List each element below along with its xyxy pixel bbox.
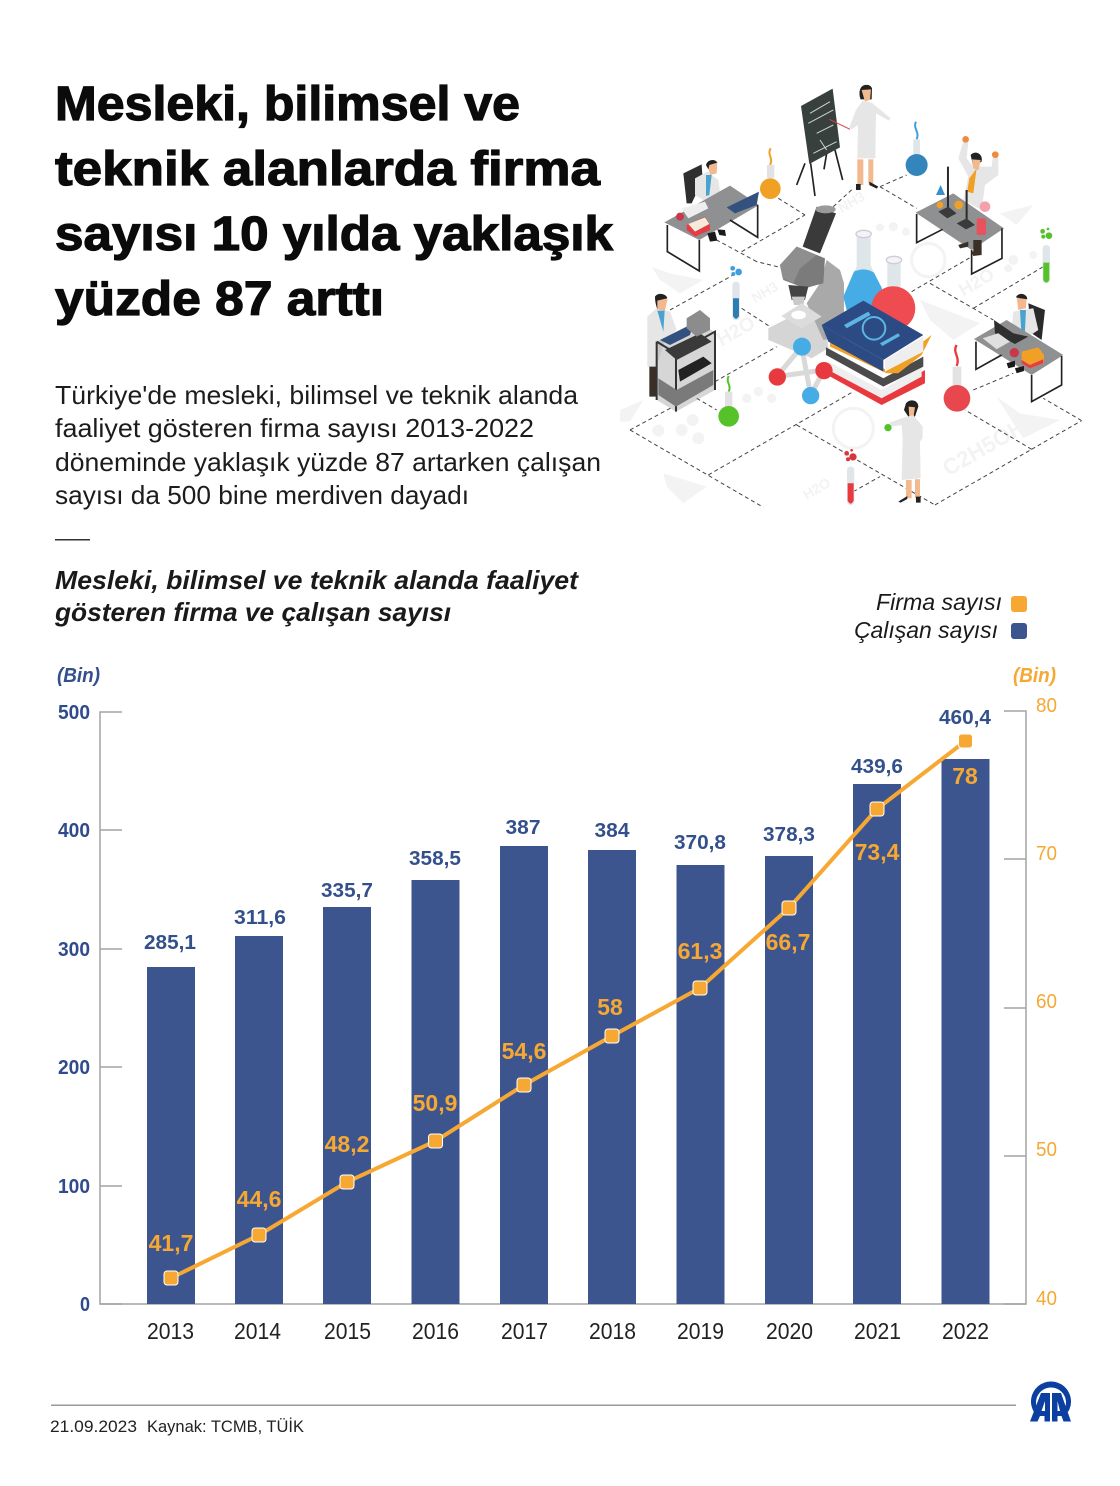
line values: 78 xyxy=(952,763,978,789)
bar values: 285,1 xyxy=(144,932,196,954)
scientist holding flask xyxy=(884,400,923,503)
flask: blue top xyxy=(906,122,928,176)
test tube blue xyxy=(730,266,742,320)
flask: green xyxy=(718,376,739,427)
floor grid dashes xyxy=(630,175,1082,507)
left axis unit: (Bin) xyxy=(57,665,100,687)
left axis xyxy=(58,702,122,1316)
left axis: 300 xyxy=(58,939,90,961)
test tube green xyxy=(1040,228,1052,283)
year labels: 2018 xyxy=(589,1318,636,1344)
faint background symbols: C2H5OH xyxy=(938,414,1029,481)
year labels: 2017 xyxy=(501,1318,548,1344)
line values: 41,7 xyxy=(149,1230,193,1256)
title xyxy=(55,78,613,326)
year labels: 2014 xyxy=(234,1318,281,1344)
faint background symbols: NH3 xyxy=(835,188,868,216)
line values: 50,9 xyxy=(413,1090,457,1116)
central red flask xyxy=(871,256,915,330)
legend: Çalışan sayısı xyxy=(854,617,998,643)
left axis: 500 xyxy=(58,702,90,724)
chart subtitle xyxy=(54,565,579,627)
year labels: 2020 xyxy=(766,1318,813,1344)
year labels: 2016 xyxy=(412,1318,459,1344)
legend xyxy=(854,589,1027,643)
right axis xyxy=(1004,695,1057,1310)
firm count line xyxy=(164,734,972,1285)
left axis: 200 xyxy=(58,1057,90,1079)
intro text: sayısı da 500 bine merdiven dayadı xyxy=(55,480,469,510)
line values: 58 xyxy=(597,994,623,1020)
line values: 73,4 xyxy=(855,839,900,865)
bar values: 387 xyxy=(506,817,540,839)
footer source: Kaynak: TCMB, TÜİK xyxy=(147,1417,304,1436)
faint background symbols: NH3 xyxy=(748,278,781,306)
faint background symbols: H2O xyxy=(713,312,759,351)
line values: 44,6 xyxy=(237,1186,281,1212)
year labels: 2019 xyxy=(677,1318,724,1344)
AA logo xyxy=(1030,1381,1071,1422)
bar values: 370,8 xyxy=(674,832,726,854)
faint background symbols: H2O xyxy=(955,264,998,300)
title: yüzde 87 arttı xyxy=(55,273,384,326)
bar values xyxy=(144,707,992,954)
line values: 48,2 xyxy=(325,1131,369,1157)
faint background symbols: H2O xyxy=(800,474,833,503)
bar values: 384 xyxy=(594,820,630,842)
scientist at equipment rack xyxy=(647,294,715,412)
bar values: 335,7 xyxy=(321,880,373,902)
line values: 54,6 xyxy=(502,1038,546,1064)
left axis: 0 xyxy=(80,1294,90,1316)
intro text: faaliyet gösteren firma sayısı 2013-2022 xyxy=(55,413,534,443)
title: sayısı 10 yılda yaklaşık xyxy=(55,208,613,261)
chart xyxy=(57,665,1057,1344)
blackboard and teacher xyxy=(797,85,891,196)
line values: 61,3 xyxy=(678,938,722,964)
footer source xyxy=(50,1417,304,1436)
right axis: 80 xyxy=(1036,695,1057,717)
right axis: 50 xyxy=(1036,1139,1057,1161)
line values: 66,7 xyxy=(766,929,810,955)
bar values: 358,5 xyxy=(409,848,461,870)
line values xyxy=(149,763,978,1256)
year labels: 2013 xyxy=(147,1318,194,1344)
right axis unit: (Bin) xyxy=(1013,665,1056,687)
left axis: 400 xyxy=(58,820,90,842)
intro text: Türkiye'de mesleki, bilimsel ve teknik alanda xyxy=(55,380,579,410)
bar values: 460,4 xyxy=(939,707,992,729)
footer source: 21.09.2023 xyxy=(50,1418,137,1436)
molecule model xyxy=(769,338,833,404)
flask: orange xyxy=(760,148,781,199)
title: teknik alanlarda firma xyxy=(55,143,600,196)
right axis: 40 xyxy=(1036,1288,1057,1310)
bar values: 378,3 xyxy=(763,824,815,846)
microscope xyxy=(768,205,844,358)
right axis: 60 xyxy=(1036,991,1057,1013)
intro text: döneminde yaklaşık yüzde 87 artarken çalışan xyxy=(55,447,601,477)
flask: red xyxy=(944,345,970,412)
baseline xyxy=(100,1303,1026,1305)
illustration: laboratory isometric scene xyxy=(620,85,1082,507)
chart subtitle: Mesleki, bilimsel ve teknik alanda faaliyet xyxy=(55,565,579,595)
year labels: 2021 xyxy=(854,1318,901,1344)
test tube red xyxy=(844,449,857,505)
year labels: 2022 xyxy=(942,1318,989,1344)
bars xyxy=(147,759,990,1304)
intro text xyxy=(55,380,601,510)
right axis: 70 xyxy=(1036,843,1057,865)
central blue flask xyxy=(843,230,882,310)
chart subtitle: gösteren firma ve çalışan sayısı xyxy=(54,597,451,627)
year labels: 2015 xyxy=(324,1318,371,1344)
bar values: 439,6 xyxy=(851,756,903,778)
scientist at desk top left xyxy=(664,160,759,271)
year labels xyxy=(147,1318,989,1344)
title: Mesleki, bilimsel ve xyxy=(55,78,520,131)
left axis: 100 xyxy=(58,1176,90,1198)
faint background symbols xyxy=(620,188,1060,503)
legend: Firma sayısı xyxy=(876,589,1002,615)
scientist at desk right xyxy=(974,294,1063,402)
bar values: 311,6 xyxy=(234,907,286,929)
stack of books xyxy=(822,301,932,405)
scientist at lab bench top right xyxy=(916,136,1004,274)
